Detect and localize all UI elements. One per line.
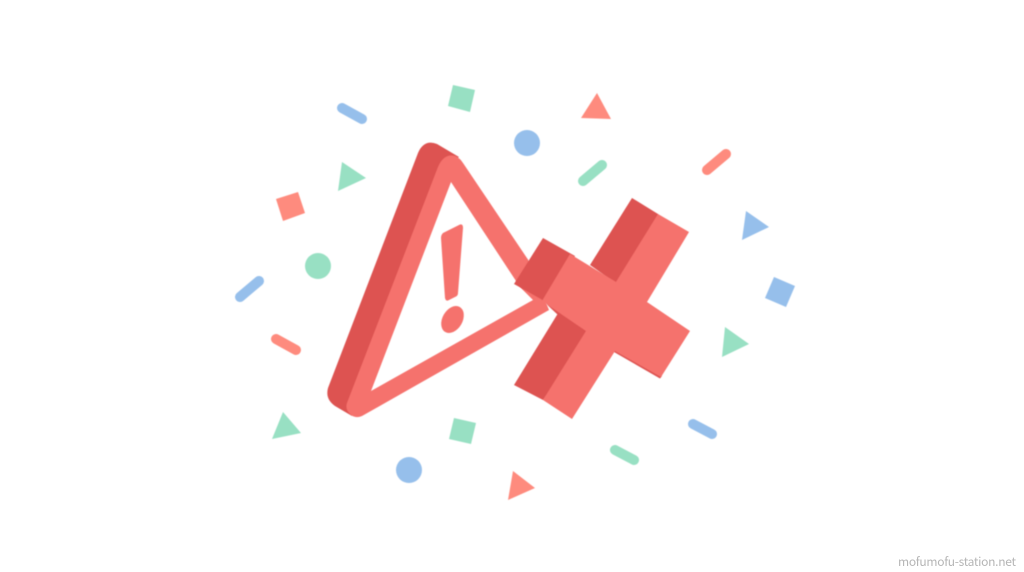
cross [514, 198, 690, 419]
confetti: salmon square [276, 192, 305, 221]
confetti: salmon pills [276, 154, 726, 350]
confetti: blue circles [396, 130, 540, 483]
cross front face [542, 214, 690, 419]
confetti: salmon triangles [508, 93, 611, 500]
exclamation mark bar [441, 224, 463, 301]
warning triangle [327, 143, 549, 417]
confetti: green triangles [272, 162, 749, 439]
cross side faces [514, 198, 664, 400]
confetti: green squares [448, 85, 476, 444]
confetti: green circle [305, 253, 331, 279]
confetti: blue triangle [742, 211, 769, 240]
confetti: blue square [765, 277, 795, 307]
confetti: green pills [583, 165, 634, 460]
triangle front face [346, 155, 549, 417]
exclamation mark dot [437, 302, 468, 337]
confetti: blue pills [240, 108, 712, 434]
confetti shapes [240, 85, 795, 500]
triangle side face [327, 143, 459, 416]
watermark: mofumofu-station.net [898, 553, 1016, 570]
